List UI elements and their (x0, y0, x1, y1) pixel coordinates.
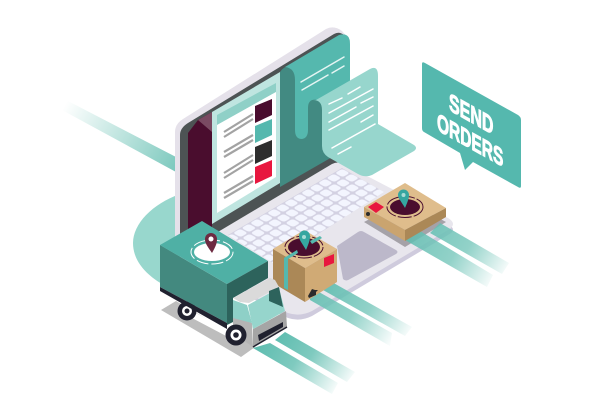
mint paper (313, 68, 416, 176)
box undercarriage (160, 287, 227, 329)
keyboard (228, 168, 384, 263)
background semicircle (133, 194, 180, 284)
teal folded sheet (285, 34, 350, 139)
red label (368, 202, 384, 213)
box two shadow (364, 200, 446, 247)
front wheel (226, 324, 246, 346)
small mark (366, 212, 370, 216)
base deck (196, 162, 453, 315)
bubble text: ORDERS (437, 107, 503, 173)
cab bottom edge (253, 327, 287, 347)
truck (160, 221, 287, 357)
cab roof (233, 278, 279, 303)
laptop lid (175, 27, 350, 240)
windshield dark (269, 287, 283, 307)
sidebar highlight (198, 112, 212, 132)
cab front lower (253, 311, 287, 347)
box top (160, 221, 268, 284)
box two (364, 183, 446, 241)
box right face (227, 261, 268, 325)
trackpad (337, 231, 398, 280)
cab lower side (233, 316, 253, 347)
paper lines (329, 87, 375, 154)
box left face (160, 245, 227, 323)
delivery hole (288, 238, 320, 256)
speech bubble (422, 62, 521, 188)
base underside (196, 168, 453, 320)
rear wheel (178, 302, 196, 320)
teal dark panel (280, 66, 345, 187)
box tape (284, 256, 288, 290)
colour swatches (255, 99, 272, 184)
teal pin (299, 230, 310, 250)
ground shadow (161, 301, 255, 357)
box one (273, 230, 337, 302)
delivery streaks (253, 223, 509, 394)
cab (226, 278, 287, 347)
grille (258, 322, 283, 341)
delivery hole (390, 199, 420, 215)
document text rows (224, 114, 253, 198)
screen panel (212, 72, 280, 224)
windshield (248, 288, 285, 329)
teal sheet lines (301, 57, 344, 90)
side window (233, 300, 252, 323)
laptop base (196, 162, 453, 320)
teal pin (398, 190, 409, 208)
plum sidebar (188, 112, 212, 232)
white gap under box (192, 311, 228, 337)
arrow mark (308, 289, 318, 298)
document (217, 92, 276, 213)
red label (324, 254, 334, 267)
header strip (217, 83, 276, 125)
lid dark bezel (180, 33, 345, 240)
bubble text: SEND (449, 87, 493, 141)
left light streak (62, 100, 176, 172)
location marker (191, 233, 233, 264)
lid outer edge (175, 27, 350, 240)
